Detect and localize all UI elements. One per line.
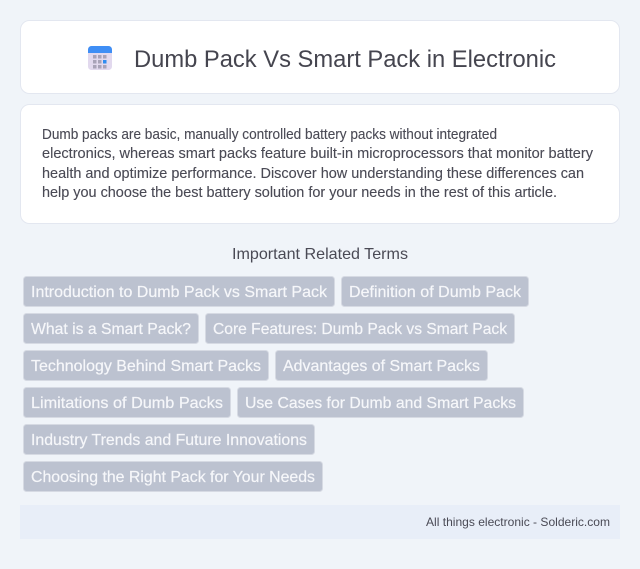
tag: industry trends: Industry Trends and Future Innovations [31,432,307,449]
tag: industry trends [24,424,314,454]
tag: technology: Technology Behind Smart Packs [31,358,261,375]
tag: introduction: Introduction to Dumb Pack vs Smart Pack [31,284,328,301]
footer: All things electronic - Solderic.com [426,515,610,529]
tag: definition: Definition of Dumb Pack [349,284,522,301]
panel: description: help you choose the best battery solution for your needs in the rest of this article. [42,185,557,201]
tag: technology [24,350,268,380]
tag: core features [206,314,514,344]
panel: description: health and optimize performance. Discover how understanding these differences can [42,166,584,182]
tag: what is a smart pack: What is a Smart Pack? [31,321,191,338]
footer [20,505,620,539]
tag: choosing [24,462,322,492]
tag: advantages: Advantages of Smart Packs [283,358,480,375]
panel: title header [20,20,620,94]
tag: introduction [24,276,334,306]
tag: limitations [24,388,230,418]
title: Dumb Pack Vs Smart Pack in Electronic [134,46,556,73]
tag: choosing: Choosing the Right Pack for Your Needs [31,469,315,486]
icon: calendar [88,46,112,70]
tag: limitations: Limitations of Dumb Packs [31,395,223,412]
tag: what is a smart pack [24,314,198,344]
tag: definition [342,276,528,306]
panel: description: Dumb packs are basic, manually controlled battery packs without integrated [42,127,497,143]
tag: core features: Core Features: Dumb Pack vs Smart Pack [213,321,508,338]
panel: description [20,104,620,224]
tag: advantages [276,350,488,380]
tag: use cases: Use Cases for Dumb and Smart Packs [245,395,516,412]
heading: related terms: Important Related Terms [232,246,408,263]
tag list [24,276,528,492]
tag: use cases [238,388,524,418]
panel: description: electronics, whereas smart packs feature built-in microprocessors that monitor battery [42,146,594,162]
